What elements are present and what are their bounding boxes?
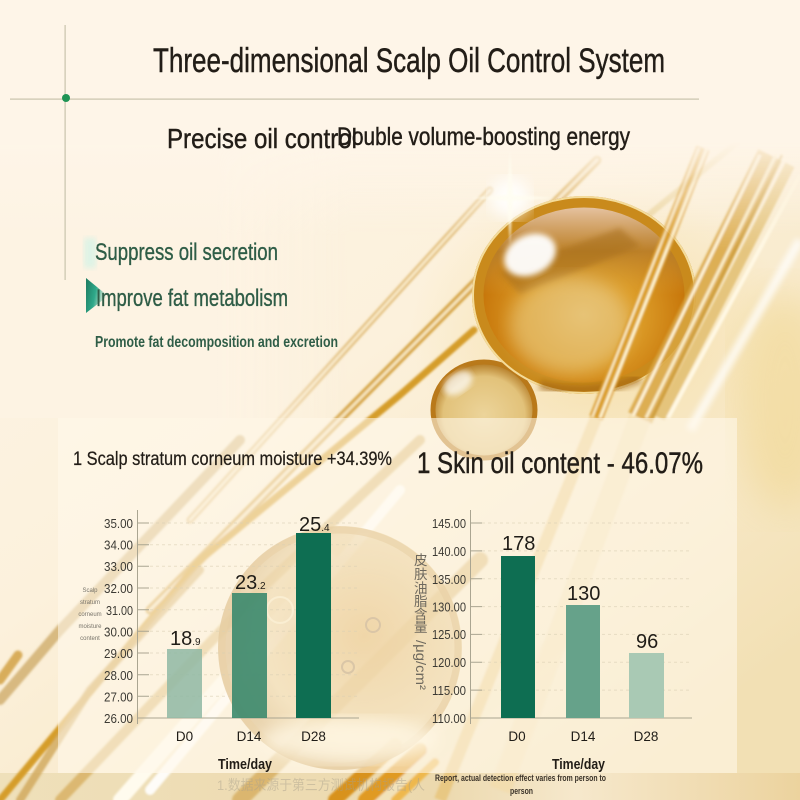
axis labels — [104, 516, 133, 726]
footnote watermark: 1.数据来源于第三方测试机构报告(人 — [217, 777, 425, 793]
bar chart: skin oil — [413, 510, 692, 773]
subheading: double volume-boosting energy: Double volume-boosting energy — [337, 123, 630, 151]
y axis title: moisture — [78, 624, 102, 630]
category labels: D28 — [634, 729, 658, 744]
benefit: suppress oil secretion: Suppress oil secretion — [95, 239, 278, 266]
y axis title: 皮肤油脂含量 — [414, 553, 428, 635]
value: 178: 178 — [502, 533, 535, 555]
bar: D14 — [566, 605, 600, 718]
axis labels: 145.00 — [432, 516, 466, 531]
oil droplet: small — [431, 360, 537, 460]
axis labels: 28.00 — [104, 668, 133, 683]
axis labels: 35.00 — [104, 516, 133, 531]
bar: D28 — [629, 653, 664, 718]
warm glow behind oil droplets — [410, 180, 800, 510]
axis labels: 33.00 — [104, 559, 133, 574]
benefit: improve fat metabolism: Improve fat metabolism — [96, 285, 288, 312]
axis labels: 135.00 — [432, 572, 466, 587]
y axis title: Scalp — [82, 588, 98, 594]
oil droplet: faded lower bubble — [218, 526, 462, 770]
axis labels: 31.00 — [106, 603, 133, 618]
fade of artwork toward top — [0, 0, 800, 235]
icon: teal arrow marker — [86, 278, 108, 313]
footer band — [0, 773, 800, 800]
x axis title: Time/day — [218, 756, 273, 773]
crosshair lines and dot — [10, 25, 699, 280]
axis labels: 27.00 — [104, 690, 133, 704]
footnote: Report, actual detection effect varies from person to — [435, 773, 606, 783]
y axis title: corneum — [78, 612, 102, 618]
light flare — [470, 150, 555, 245]
y axis title — [413, 553, 428, 691]
bar: D28 — [296, 533, 331, 718]
bar chart: scalp moisture — [78, 510, 359, 773]
value: 25.4: 25.4 — [299, 514, 330, 536]
category labels — [176, 729, 326, 744]
category labels — [508, 729, 658, 744]
axis labels: 125.00 — [432, 627, 466, 642]
foreground strands over droplets — [440, 148, 800, 800]
axis labels: 32.00 — [104, 581, 133, 596]
axis labels: 29.00 — [104, 646, 133, 661]
value: 23.2: 23.2 — [235, 572, 266, 594]
x axis title: Time/day — [552, 756, 606, 773]
y axis title — [78, 588, 102, 642]
y axis title: content — [80, 636, 100, 642]
axis labels: 26.00 — [104, 711, 133, 726]
fade of artwork toward left — [0, 150, 350, 418]
category labels: D0 — [508, 729, 526, 744]
value: 130: 130 — [567, 583, 600, 605]
axis labels: 34.00 — [104, 538, 133, 552]
bar: D0 — [167, 649, 202, 718]
axis labels: 30.00 — [104, 624, 133, 640]
benefit: promote fat decomposition: Promote fat decomposition and excretion — [95, 334, 338, 351]
axis labels: 140.00 — [432, 544, 466, 559]
oil droplet: large — [472, 196, 696, 394]
axis labels: 110.00 — [432, 711, 466, 726]
value: 96: 96 — [636, 631, 658, 653]
subheading: precise oil control: Precise oil control — [167, 123, 357, 154]
category labels: D28 — [301, 729, 326, 744]
category labels: D14 — [237, 729, 262, 744]
footnote — [435, 773, 606, 796]
footnote: person — [510, 786, 533, 796]
axis labels: 130.00 — [432, 600, 466, 614]
value: 18.9: 18.9 — [170, 628, 201, 650]
right chart heading: 1 Skin oil content - 46.07% — [417, 447, 703, 480]
category labels: D0 — [176, 729, 193, 744]
axis labels: 115.00 — [432, 683, 466, 698]
y axis title: /μg/cm² — [413, 640, 428, 691]
category labels: D14 — [571, 729, 596, 744]
left chart heading: 1 Scalp stratum corneum moisture +34.39% — [73, 449, 392, 470]
icon: pale glow marker — [84, 238, 96, 268]
translucent data panel — [58, 418, 737, 773]
bar: D0 — [501, 556, 535, 718]
bar: D14 — [232, 593, 267, 718]
hair strands — [0, 140, 740, 800]
y axis title: stratum — [80, 600, 100, 606]
axis labels: 120.00 — [432, 655, 466, 670]
axis labels — [432, 516, 466, 726]
